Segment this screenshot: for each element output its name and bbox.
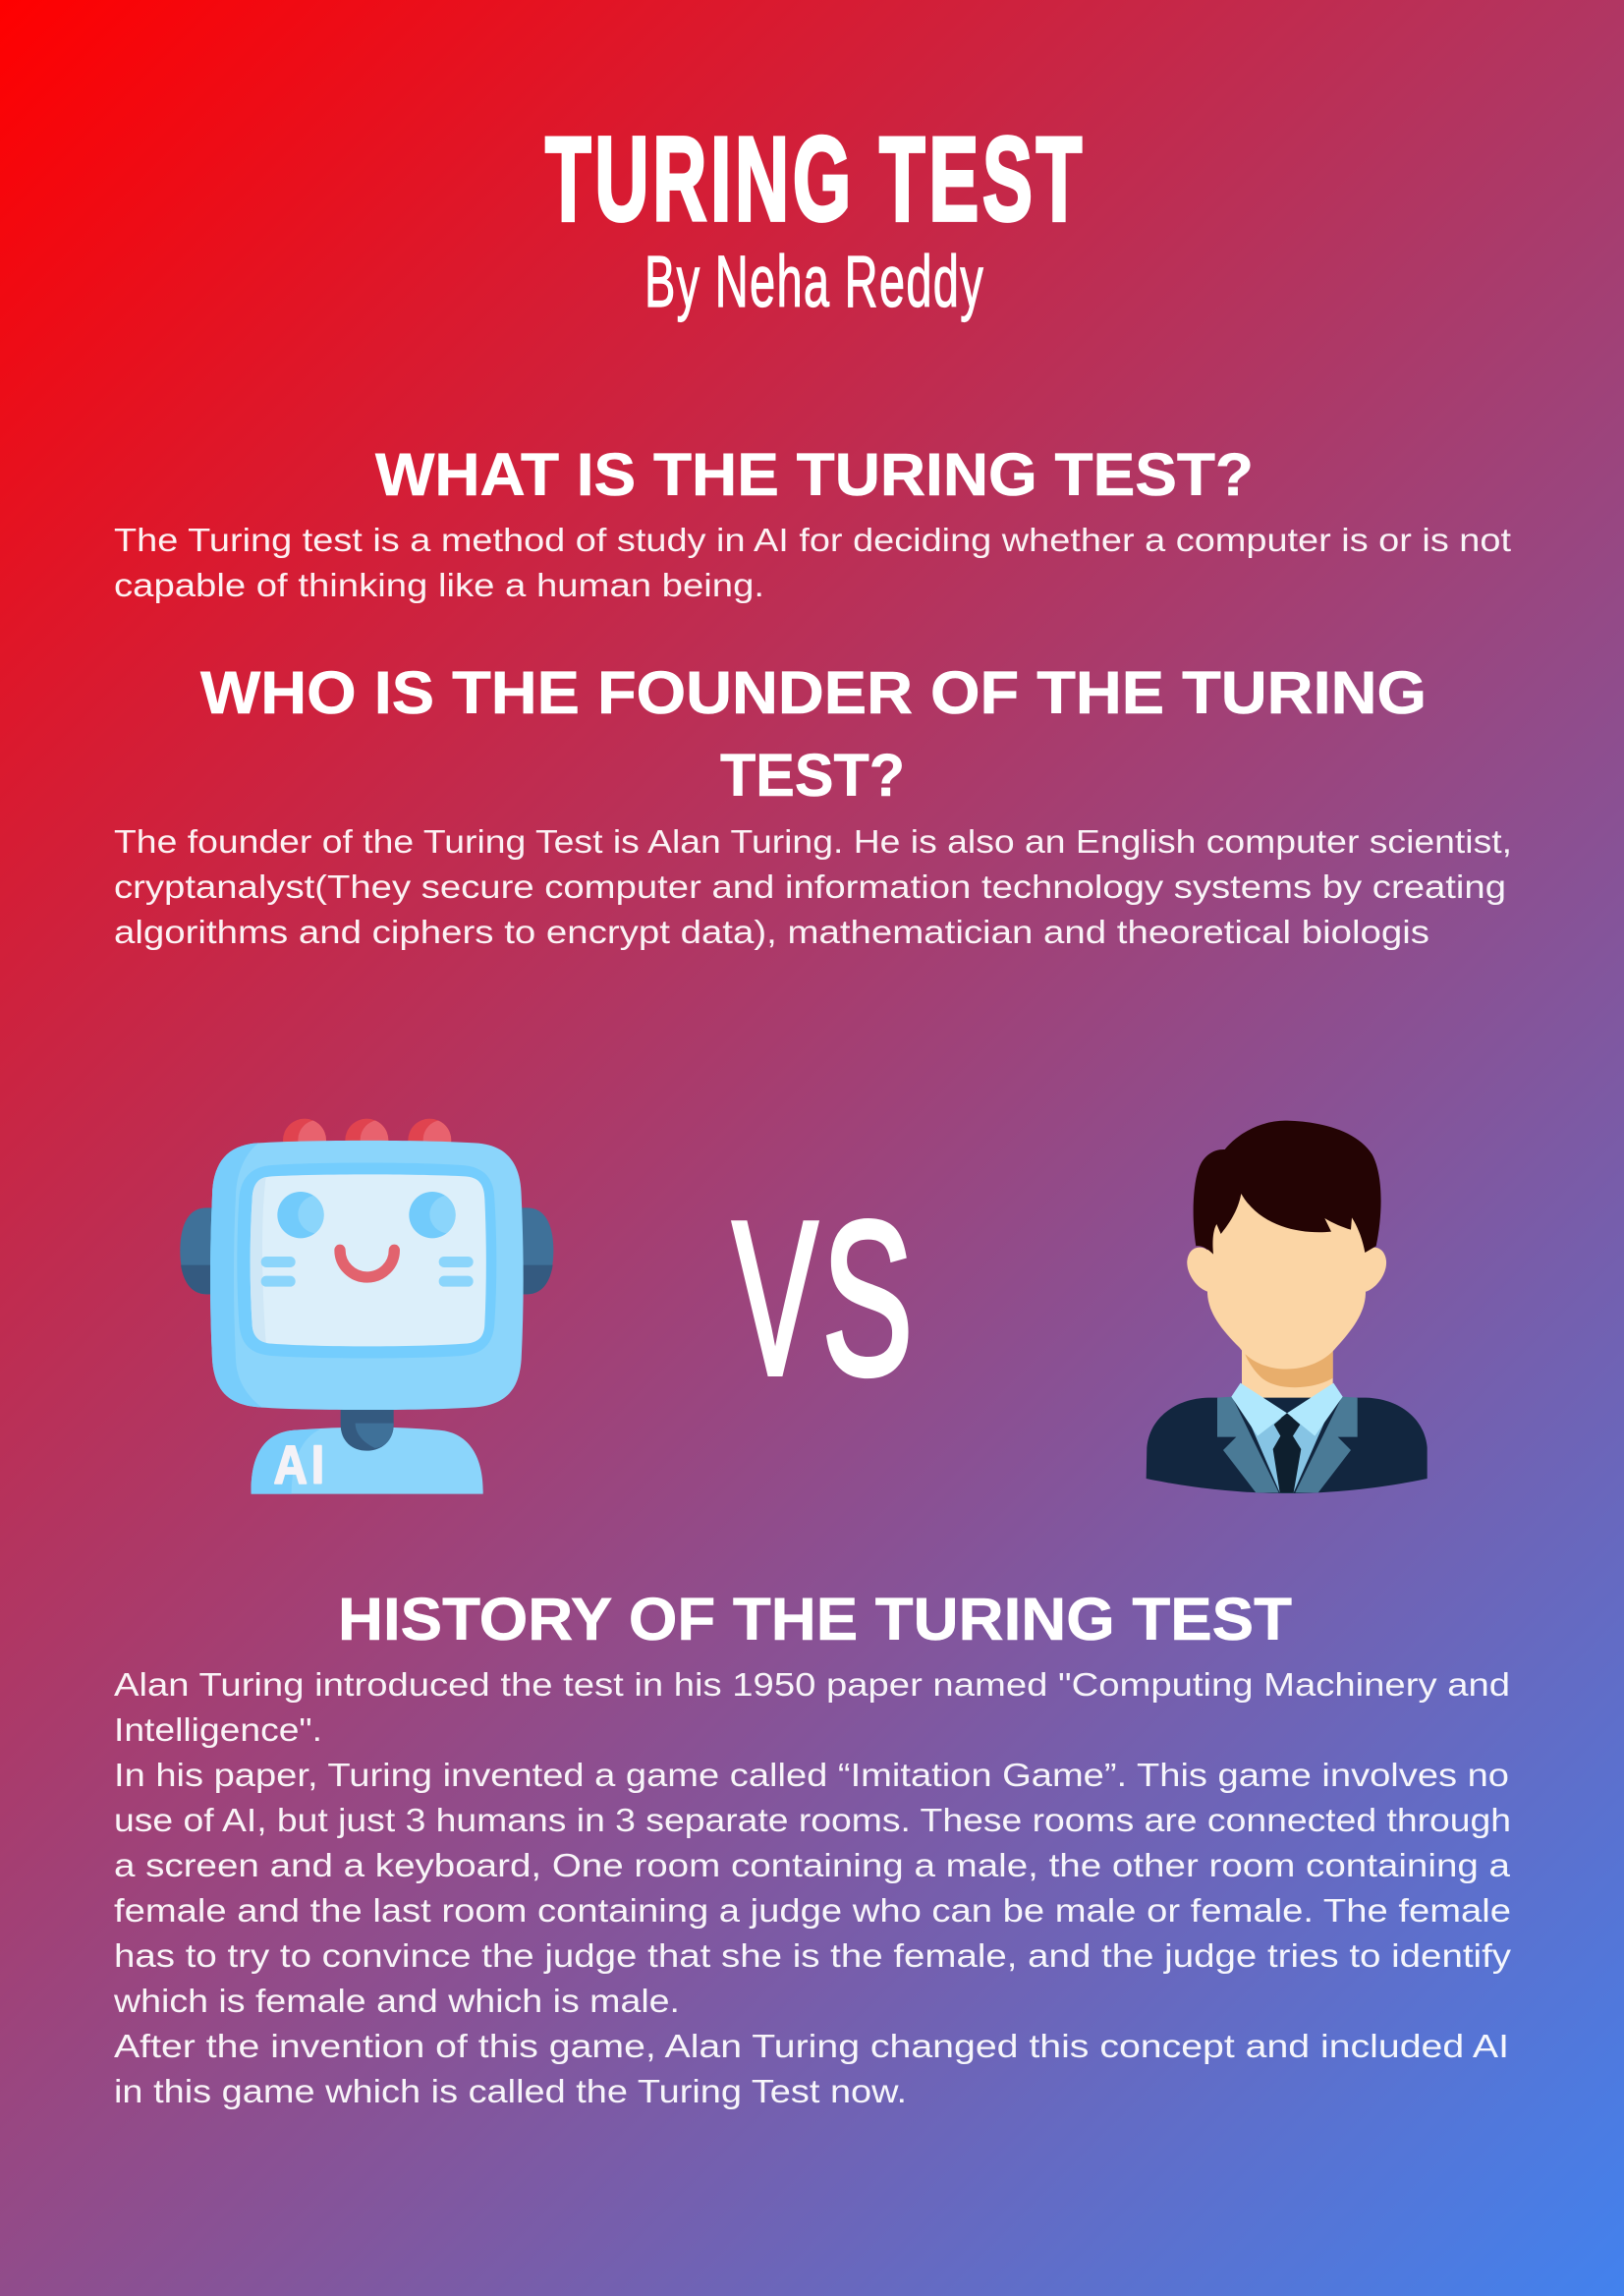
text block: history: has to try to convince the judge that she is the female, and the judge tries to identify	[114, 1938, 1511, 1975]
title: TURING TEST	[545, 112, 1086, 246]
label: VS: S	[822, 1177, 913, 1421]
text block: history: which is female and which is male.	[113, 1984, 680, 2020]
text block: history: a screen and a keyboard, One room containing a male, the other room containing a	[114, 1848, 1510, 1884]
text block: history: Intelligence".	[114, 1712, 322, 1749]
icon: AI robot: AI	[274, 1433, 328, 1494]
text block: history	[113, 1667, 1511, 2110]
heading: what is the turing test: WHAT IS THE TURING TEST?	[375, 441, 1254, 508]
text block: founder	[114, 824, 1512, 951]
text block: history: in this game which is called the Turing Test now.	[114, 2074, 907, 2110]
label: VS: V	[733, 1177, 817, 1421]
text block: definition: The Turing test is a method of study in AI for deciding whether a computer is or is not	[114, 523, 1512, 559]
heading: who is the founder: WHO IS THE FOUNDER OF THE TURING	[200, 659, 1427, 726]
subtitle: author: By Neha Reddy	[644, 241, 984, 322]
text block: history: After the invention of this game, Alan Turing changed this concept and included AI	[114, 2029, 1509, 2065]
text block: history: use of AI, but just 3 humans in 3 separate rooms. These rooms are connected through	[114, 1803, 1511, 1839]
text block: definition	[114, 523, 1512, 604]
text block: history: female and the last room containing a judge who can be male or female. The female	[114, 1893, 1511, 1930]
text block: history: In his paper, Turing invented a game called “Imitation Game”. This game involves no	[114, 1758, 1509, 1794]
text block: founder: The founder of the Turing Test is Alan Turing. He is also an English computer scientist,	[114, 824, 1512, 861]
text block: founder: cryptanalyst(They secure computer and information technology systems by creating	[114, 869, 1506, 906]
icon: human businessman	[1147, 1121, 1428, 1493]
heading: who is the founder	[200, 659, 1427, 809]
icon: AI robot	[180, 1119, 553, 1494]
text block: history: Alan Turing introduced the test in his 1950 paper named "Computing Machinery and	[114, 1667, 1510, 1704]
text block: definition: capable of thinking like a human being.	[114, 568, 764, 604]
heading: history: HISTORY OF THE TURING TEST	[338, 1586, 1292, 1652]
text block: founder: algorithms and ciphers to encrypt data), mathematician and theoretical biologis	[114, 915, 1429, 951]
heading: who is the founder: TEST?	[720, 742, 905, 809]
